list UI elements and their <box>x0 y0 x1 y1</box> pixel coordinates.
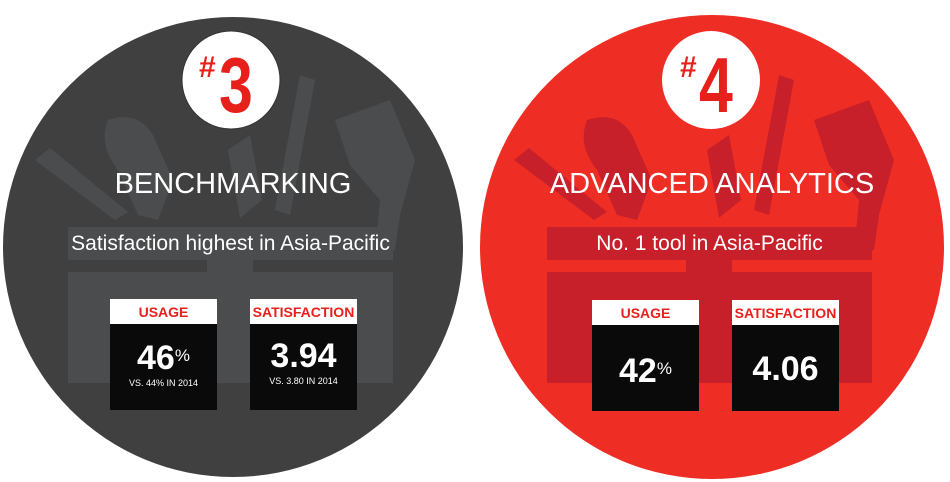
card: usage 42% <box>592 300 699 411</box>
card: usage 46%: VS. 44% IN 2014 <box>129 378 198 388</box>
badge #4: # <box>680 51 697 84</box>
heading: benchmarking: BENCHMARKING <box>115 168 351 200</box>
card: usage 46% <box>110 299 217 410</box>
card: usage 42%: USAGE <box>621 305 670 321</box>
badge #3: # <box>199 51 216 84</box>
card: usage 42%: 42% <box>619 352 672 390</box>
subtitle: benchmarking: Satisfaction highest in Asia-Pacific <box>71 232 390 255</box>
badge #3 <box>182 31 280 129</box>
card: usage 46%: 46% <box>137 339 190 377</box>
badge #4: 4 <box>699 42 733 129</box>
card: satisfaction 4.06 <box>732 300 839 411</box>
left circle background <box>3 17 463 477</box>
card: satisfaction 4.06: SATISFACTION <box>735 305 836 321</box>
card: satisfaction 3.94 <box>250 299 357 410</box>
badge #4 <box>662 31 760 129</box>
card: satisfaction 3.94: SATISFACTION <box>253 304 354 320</box>
card: satisfaction 3.94: 3.94 <box>270 337 337 375</box>
badge #3: 3 <box>219 42 253 129</box>
subtitle: advanced analytics: No. 1 tool in Asia-Pacific <box>596 232 823 255</box>
right circle background <box>480 15 944 479</box>
card: satisfaction 4.06: 4.06 <box>752 350 819 388</box>
heading: advanced analytics: ADVANCED ANALYTICS <box>550 168 874 200</box>
card: satisfaction 3.94: VS. 3.80 IN 2014 <box>269 376 338 386</box>
card: usage 46%: USAGE <box>139 304 188 320</box>
